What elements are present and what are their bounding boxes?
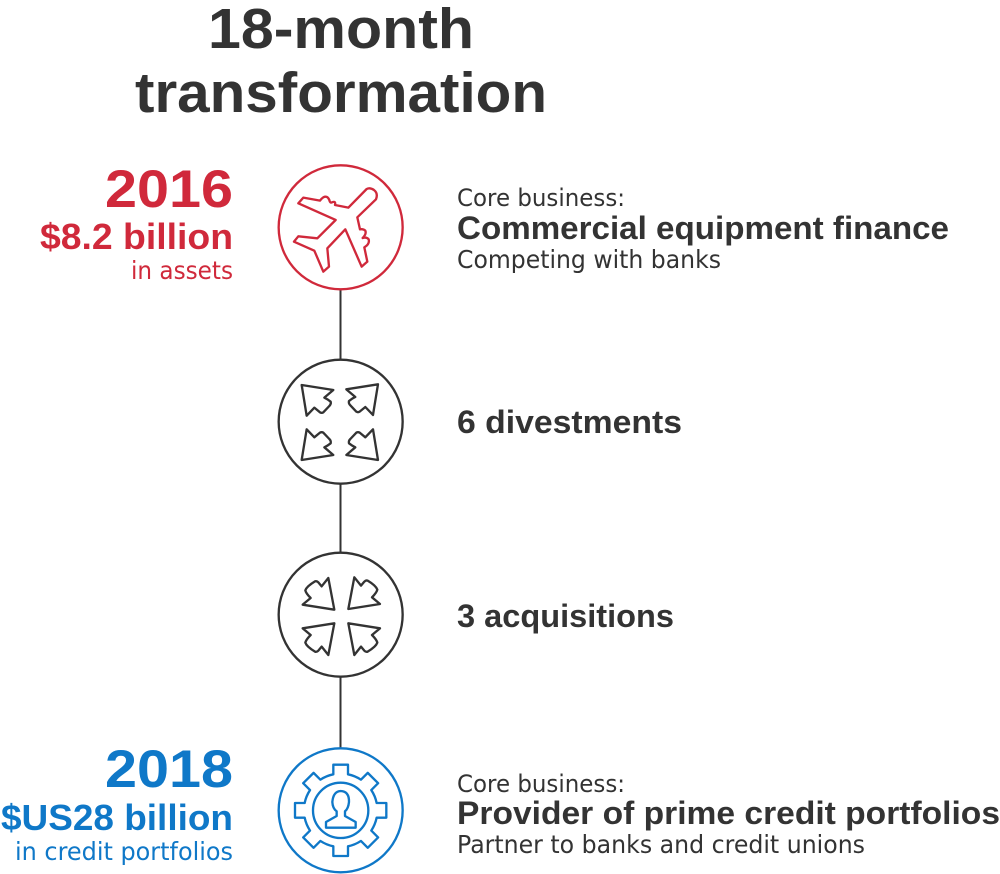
2018 core business: Core business: xyxy=(457,770,625,798)
2016 core business xyxy=(457,184,949,274)
divestments label: 6 divestments xyxy=(457,404,682,440)
title xyxy=(135,0,547,125)
icon: acquisitions arrows pointing inward xyxy=(279,553,403,677)
2016 core business: Competing with banks xyxy=(457,245,721,274)
2018 stats xyxy=(1,740,233,866)
2018 stats: $US28 billion xyxy=(1,797,233,838)
acquisitions label: 3 acquisitions xyxy=(457,598,674,634)
timeline connector xyxy=(340,289,342,748)
icon: divestments arrows pointing outward xyxy=(279,360,403,484)
2018 stats: 2018 xyxy=(105,740,233,799)
2016 core business: Commercial equipment finance xyxy=(457,210,949,246)
2016 core business: Core business: xyxy=(457,184,625,212)
2016 stats xyxy=(40,160,233,285)
icon: airplane in circle xyxy=(279,165,403,289)
2016 stats: $8.2 billion xyxy=(40,216,233,257)
title: transformation xyxy=(135,61,547,125)
2018 core business: Partner to banks and credit unions xyxy=(457,830,865,859)
2018 core business xyxy=(457,770,1000,859)
2016 stats: 2016 xyxy=(105,160,233,219)
2018 core business: Provider of prime credit portfolios xyxy=(457,795,1000,831)
2018 stats: in credit portfolios xyxy=(15,837,233,866)
2016 stats: in assets xyxy=(131,256,233,285)
icon: gear with person xyxy=(279,748,403,872)
